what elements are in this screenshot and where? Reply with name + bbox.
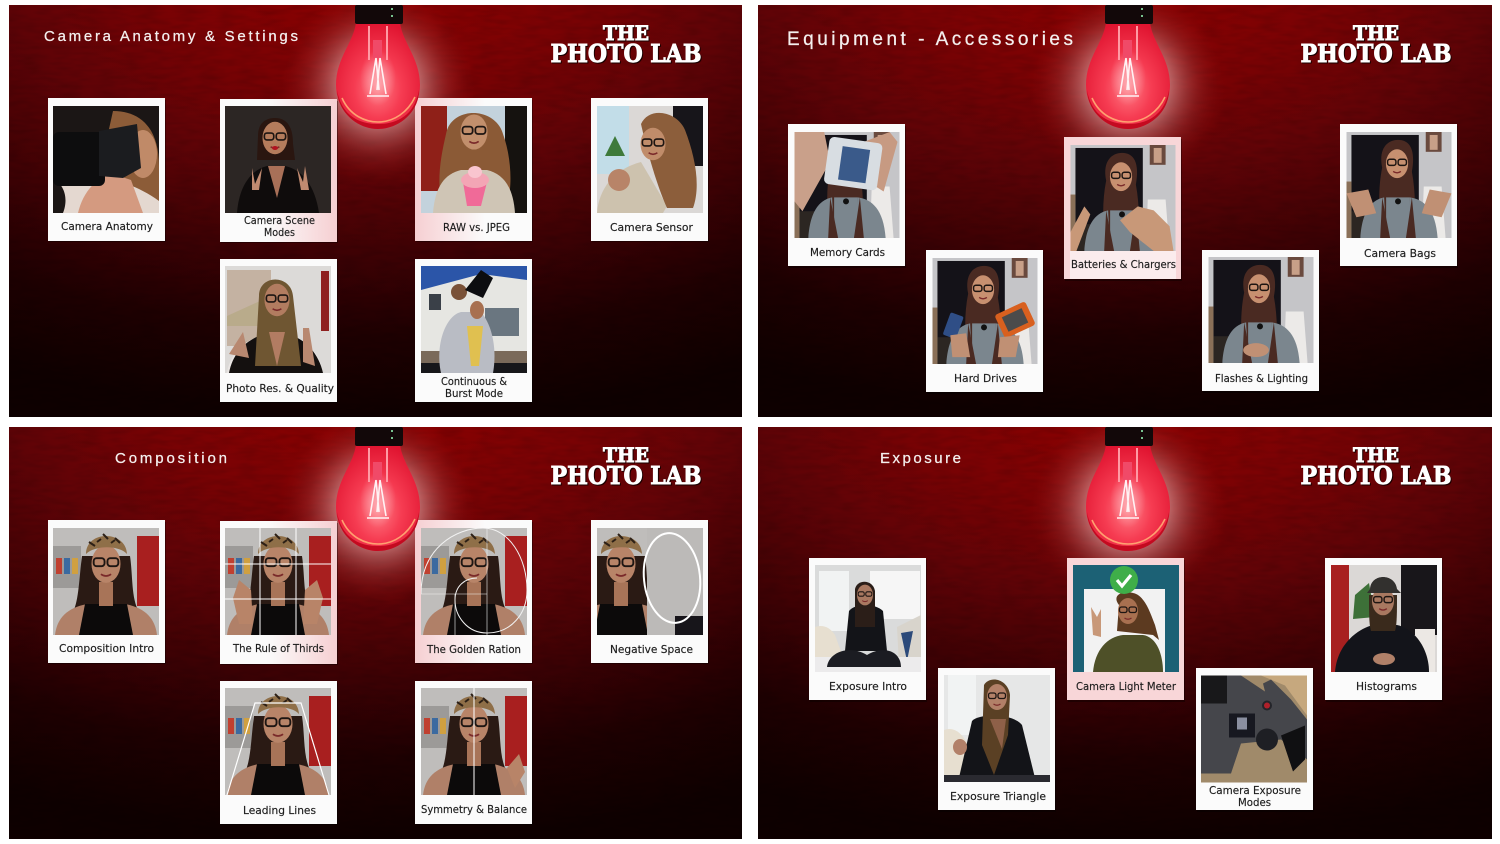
panel: Composition <box>9 407 742 839</box>
photo: black hoodie and cap <box>1331 565 1437 672</box>
card: Negative Space <box>568 520 709 664</box>
label: The Rule of Thirds <box>232 643 324 655</box>
label: Symmetry & Balance <box>421 804 527 816</box>
icon: green check badge <box>1110 566 1138 594</box>
photo: shooting upward outside house <box>421 266 527 373</box>
card: RAW vs. JPEG <box>415 98 533 242</box>
label: Exposure Triangle <box>950 791 1046 803</box>
logo: The Photo Lab: PHOTO LAB <box>1300 39 1452 68</box>
card: Batteries & Chargers <box>1064 137 1182 281</box>
card: Camera Exposure Modes <box>1196 668 1314 812</box>
section title: Camera Anatomy & Settings <box>44 28 298 45</box>
photo: woman in headscarf <box>53 528 159 635</box>
photo: rule of thirds grid <box>225 528 331 635</box>
label: Camera Light Meter <box>1076 681 1177 693</box>
panel: Exposure <box>758 407 1492 839</box>
panel: Camera Anatomy & Settings <box>9 0 742 417</box>
label: Histograms <box>1356 681 1417 693</box>
light halo <box>1042 429 1214 574</box>
logo: The Photo Lab <box>550 21 702 68</box>
card: Camera Anatomy <box>48 98 166 242</box>
card: Hard Drives <box>926 250 1044 394</box>
logo: The Photo Lab <box>1300 443 1452 490</box>
photo: teal cover with white inset and check badge <box>1073 565 1179 672</box>
card: Symmetry & Balance <box>415 681 533 825</box>
label: Continuous & <box>441 376 507 388</box>
photo: peace signs against dark backdrop <box>225 106 331 213</box>
label: Batteries & Chargers <box>1071 259 1176 271</box>
photo: holding memory card case <box>794 132 900 238</box>
label: Camera Sensor <box>610 222 694 234</box>
label: Exposure Intro <box>829 681 907 693</box>
light halo <box>1042 7 1214 154</box>
photo: woman behind camera lens <box>53 106 159 213</box>
card: The Rule of Thirds <box>220 521 338 665</box>
logo: The Photo Lab <box>550 443 702 490</box>
logo: The Photo Lab: THE <box>603 443 649 467</box>
light halo <box>292 7 464 174</box>
card: Camera Scene Modes <box>220 99 338 243</box>
light halo <box>292 428 464 596</box>
label: Photo Res. & Quality <box>226 383 334 395</box>
label: Flashes & Lighting <box>1215 373 1308 385</box>
photo: holding hard drives <box>932 258 1038 364</box>
logo: The Photo Lab <box>1300 21 1452 68</box>
label: Camera Anatomy <box>61 221 153 233</box>
logo: The Photo Lab: PHOTO LAB <box>550 461 702 490</box>
card: Exposure Triangle <box>938 668 1056 812</box>
card: The Golden Ration <box>415 520 533 664</box>
photo: golden spiral overlay <box>421 528 527 635</box>
logo: The Photo Lab: PHOTO LAB <box>550 39 702 68</box>
card: Camera Exposure Modes: Modes <box>1238 797 1271 809</box>
photo: hands together with chair behind <box>1208 257 1314 363</box>
section title: Composition <box>115 450 227 467</box>
label: RAW vs. JPEG <box>443 222 510 234</box>
label: Memory Cards <box>810 247 885 259</box>
photo: woman holding cupcake <box>421 106 527 213</box>
logo: The Photo Lab: THE <box>1353 21 1399 45</box>
photo: seated, smiling <box>944 675 1050 782</box>
photo: negative space highlighted <box>597 528 703 635</box>
label: Camera Exposure <box>1209 785 1301 797</box>
photo: talking with raised hand <box>1070 145 1176 251</box>
logo: The Photo Lab: THE <box>603 21 649 45</box>
card: Photo Res. & Quality <box>220 259 338 403</box>
card: Camera Sensor <box>591 98 709 242</box>
photo: symmetry line overlay <box>421 688 527 795</box>
card: Exposure Intro <box>809 558 927 702</box>
label: Camera Bags <box>1364 248 1436 260</box>
photo: seated on sofa <box>815 565 921 672</box>
photo: camera top with mode dial <box>1201 676 1307 782</box>
photo: leading lines overlay <box>225 688 331 795</box>
icon: red light bulb <box>336 427 420 551</box>
photo: woman looking sideways <box>597 106 703 213</box>
card: Flashes & Lighting <box>1202 250 1320 393</box>
card: Continuous & Burst Mode <box>415 259 533 403</box>
icon: red light bulb <box>1086 427 1170 551</box>
label: Composition Intro <box>59 643 154 655</box>
card: Continuous & Burst Mode: Burst Mode <box>445 388 503 400</box>
photo: braids, hands framing <box>225 266 331 373</box>
label: Negative Space <box>610 644 693 656</box>
label: Leading Lines <box>243 805 316 817</box>
section title: Equipment - Accessories <box>787 29 1073 50</box>
card: Histograms <box>1325 558 1443 702</box>
logo: The Photo Lab: THE <box>1353 443 1399 467</box>
panel: Equipment - Accessories <box>758 0 1492 417</box>
section title: Exposure <box>880 450 961 467</box>
card: Camera Scene Modes: Modes <box>264 227 295 239</box>
label: Camera Scene <box>244 215 315 227</box>
card: Camera Bags <box>1340 124 1458 268</box>
card: Camera Light Meter <box>1067 558 1185 702</box>
icon: red light bulb <box>1086 5 1170 129</box>
label: The Golden Ration <box>426 644 521 656</box>
card: Memory Cards <box>788 124 906 268</box>
photo: arms spread <box>1346 132 1452 238</box>
card: Leading Lines <box>220 681 338 825</box>
icon: red light bulb <box>336 5 420 129</box>
label: Hard Drives <box>954 373 1017 385</box>
logo: The Photo Lab: PHOTO LAB <box>1300 461 1452 490</box>
card: Composition Intro <box>48 520 166 664</box>
